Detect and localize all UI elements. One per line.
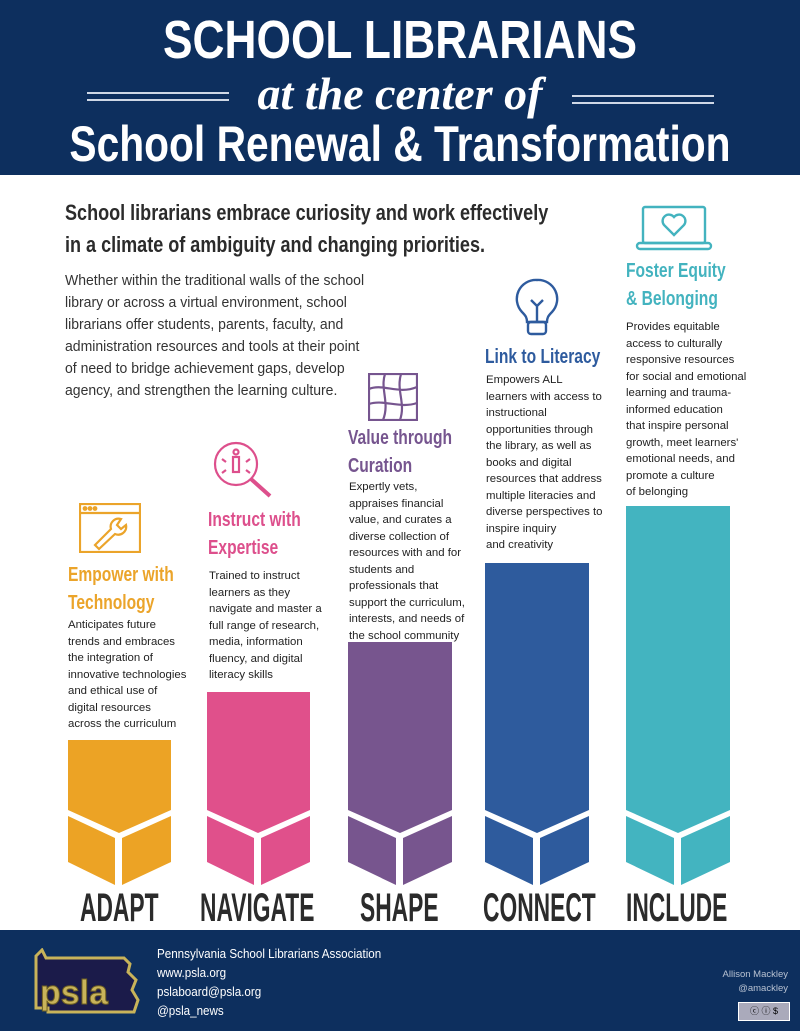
text: value: professionals that bbox=[349, 580, 438, 592]
logo: psla bbox=[34, 948, 140, 1014]
footer contact text: www.psla.org bbox=[157, 966, 226, 980]
intro paragraph: library or across a virtual environment, school bbox=[65, 295, 347, 311]
bar: shape bbox=[348, 642, 452, 885]
text: link: inspire inquiry bbox=[486, 522, 556, 534]
text: foster: that inspire personal bbox=[626, 420, 729, 432]
header banner bbox=[0, 0, 800, 175]
text: value: interests, and needs of bbox=[349, 613, 464, 625]
label: connect: CONNECT bbox=[483, 886, 596, 930]
text: value: students and bbox=[349, 564, 414, 576]
decorative subtitle: at the center of bbox=[258, 68, 542, 119]
heading: foster: & Belonging bbox=[626, 288, 718, 310]
footer contact text: pslaboard@psla.org bbox=[157, 985, 261, 999]
text: empower: trends and embraces bbox=[68, 636, 175, 648]
intro paragraph: Whether within the traditional walls of the school bbox=[65, 273, 364, 289]
icon: grid curation bbox=[368, 373, 418, 421]
text: instruct: Trained to instruct bbox=[209, 570, 300, 582]
intro paragraph: administration resources and tools at their point bbox=[65, 339, 359, 355]
text: empower: across the curriculum bbox=[68, 718, 176, 730]
heading: instruct bbox=[208, 509, 301, 559]
text: instruct: media, information bbox=[209, 636, 303, 648]
intro paragraph: librarians offer students, parents, faculty, and bbox=[65, 317, 343, 333]
text: link: books and digital bbox=[486, 456, 572, 468]
heading: value bbox=[348, 427, 452, 477]
text: instruct: learners as they bbox=[209, 586, 290, 598]
icon: cc license: ⓒ ⓘ $ bbox=[750, 1006, 778, 1016]
text: empower bbox=[68, 619, 186, 730]
text: link: multiple literacies and bbox=[486, 490, 596, 502]
footer contact text: Pennsylvania School Librarians Association bbox=[157, 947, 381, 961]
text: empower: the integration of bbox=[68, 652, 153, 664]
text: link: opportunities through bbox=[486, 424, 593, 436]
text: link: resources that address bbox=[486, 473, 602, 485]
heading: instruct: Expertise bbox=[208, 537, 278, 559]
text: link: instructional bbox=[486, 407, 547, 419]
text: link: Empowers ALL bbox=[486, 374, 563, 386]
text: foster: learning and trauma- bbox=[626, 387, 731, 399]
text: foster: access to culturally bbox=[626, 338, 722, 350]
text: value: value, and curates a bbox=[349, 514, 452, 526]
author credit bbox=[722, 969, 788, 994]
heading: instruct: Instruct with bbox=[208, 509, 301, 531]
author credit: Allison Mackley bbox=[723, 969, 788, 980]
text: empower: innovative technologies bbox=[68, 668, 186, 680]
text: foster: for social and emotional bbox=[626, 370, 746, 382]
title line 3: School Renewal & Transformation bbox=[69, 116, 731, 172]
text: foster: Provides equitable bbox=[626, 321, 720, 333]
text: foster: emotional needs, and bbox=[626, 453, 735, 465]
title line 1: SCHOOL LIBRARIANS bbox=[163, 10, 637, 70]
heading: empower: Empower with bbox=[68, 564, 174, 586]
text: foster: informed education bbox=[626, 404, 723, 416]
label: navigate: NAVIGATE bbox=[200, 886, 314, 930]
heading: link: Link to Literacy bbox=[485, 346, 600, 368]
text: link: the library, as well as bbox=[486, 440, 592, 452]
text: value: Expertly vets, bbox=[349, 481, 417, 493]
text: empower: digital resources bbox=[68, 702, 151, 714]
text: empower: Anticipates future bbox=[68, 619, 156, 631]
icon: laptop heart bbox=[636, 206, 712, 250]
bar: adapt bbox=[68, 740, 171, 885]
heading: empower: Technology bbox=[68, 592, 154, 614]
text: value bbox=[349, 481, 465, 642]
footer bbox=[0, 930, 800, 1031]
subheading bbox=[65, 200, 548, 257]
text: instruct: fluency, and digital bbox=[209, 652, 303, 664]
text: value: diverse collection of bbox=[349, 530, 449, 542]
text: instruct: full range of research, bbox=[209, 620, 319, 632]
heading: value: Curation bbox=[348, 455, 412, 477]
bar: connect bbox=[485, 563, 589, 885]
intro paragraph: agency, and strengthen the learning culture. bbox=[65, 383, 337, 399]
text: foster: responsive resources bbox=[626, 354, 734, 366]
text: instruct: navigate and master a bbox=[209, 603, 322, 615]
heading: foster bbox=[626, 260, 726, 310]
bar: include bbox=[626, 506, 730, 885]
author credit: @amackley bbox=[738, 983, 788, 994]
text: instruct bbox=[209, 570, 322, 681]
heading: empower bbox=[68, 564, 174, 614]
footer contact text bbox=[157, 947, 381, 1018]
subheading: in a climate of ambiguity and changing priorities. bbox=[65, 232, 485, 257]
logo: psla: psla bbox=[40, 974, 109, 1012]
heading: foster: Foster Equity bbox=[626, 260, 726, 282]
intro paragraph bbox=[65, 273, 364, 399]
text: link bbox=[486, 374, 602, 551]
text: empower: and ethical use of bbox=[68, 685, 157, 697]
text: value: support the curriculum, bbox=[349, 596, 465, 608]
text: link: learners with access to bbox=[486, 390, 602, 402]
icon: browser wrench bbox=[79, 503, 141, 553]
icon: magnifier bbox=[214, 442, 272, 498]
text: link: diverse perspectives to bbox=[486, 506, 602, 518]
bar: navigate bbox=[207, 692, 310, 885]
icon: light bulb bbox=[516, 278, 558, 336]
text: value: resources with and for bbox=[349, 547, 461, 559]
intro paragraph: of need to bridge achievement gaps, develop bbox=[65, 361, 345, 377]
text: foster: growth, meet learners' bbox=[626, 436, 738, 448]
text: foster: of belonging bbox=[626, 486, 688, 498]
text: value: the school community bbox=[349, 630, 459, 642]
text: instruct: literacy skills bbox=[209, 669, 273, 681]
text: link: and creativity bbox=[486, 539, 553, 551]
text: value: appraises financial bbox=[349, 498, 443, 510]
text: foster bbox=[626, 321, 746, 498]
subheading: School librarians embrace curiosity and work effectively bbox=[65, 200, 548, 225]
label: shape: SHAPE bbox=[360, 886, 439, 930]
text: foster: promote a culture bbox=[626, 470, 715, 482]
label: adapt: ADAPT bbox=[80, 886, 159, 930]
label: include: INCLUDE bbox=[626, 886, 727, 930]
icon: cc license bbox=[738, 1002, 790, 1021]
footer contact text: @psla_news bbox=[157, 1004, 224, 1018]
heading: value: Value through bbox=[348, 427, 452, 449]
